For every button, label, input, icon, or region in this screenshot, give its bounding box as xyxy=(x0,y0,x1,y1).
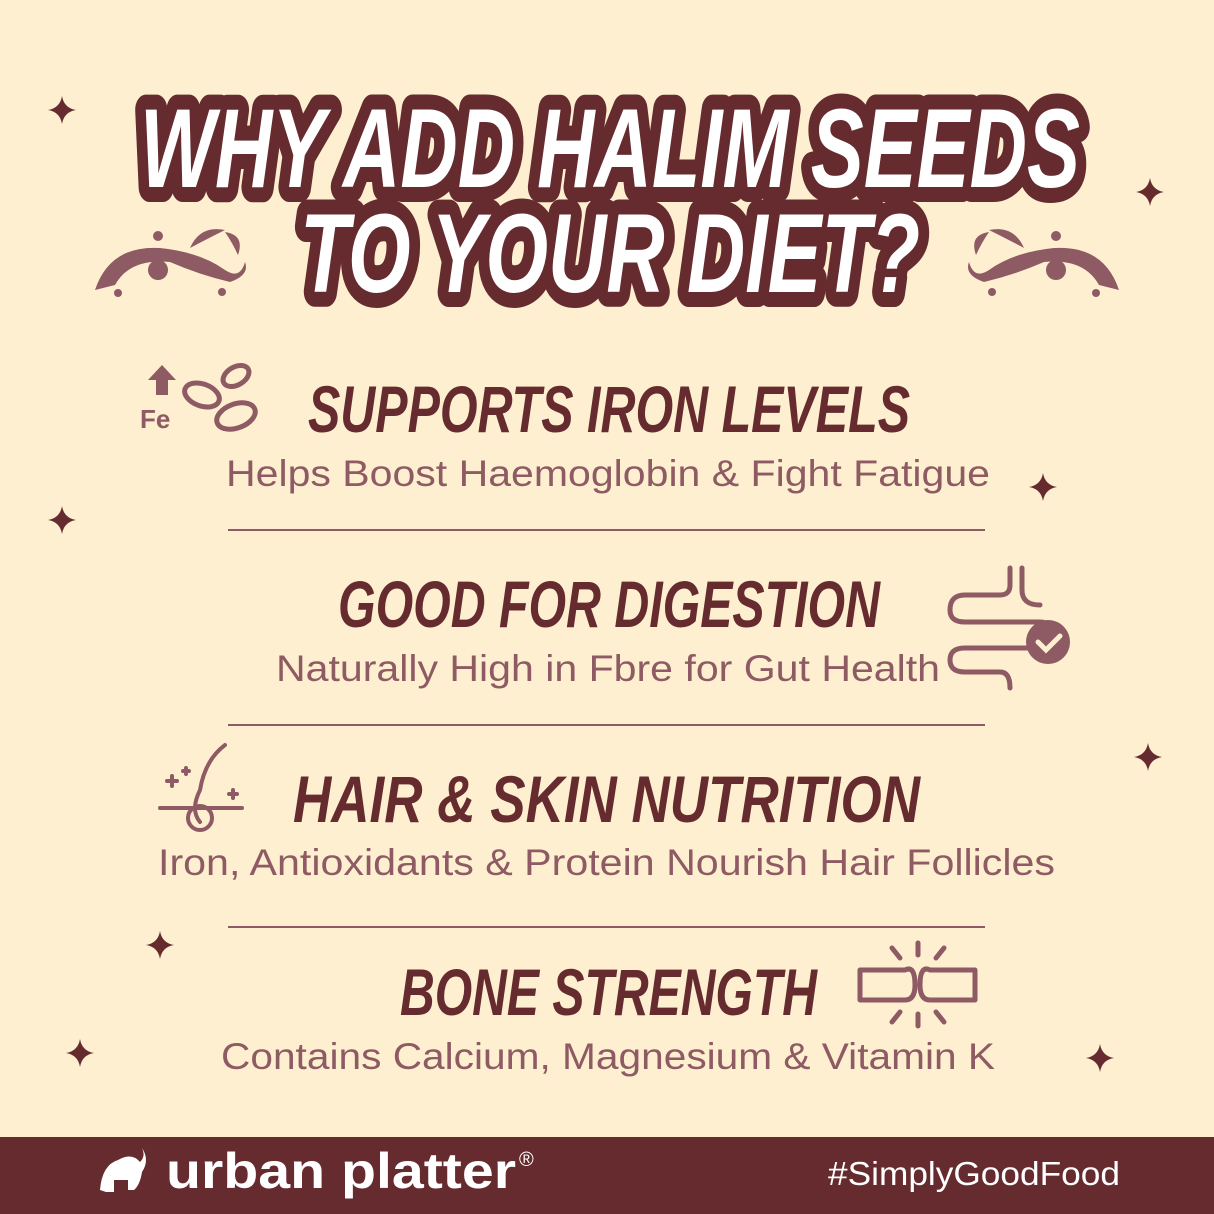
icon: iron Fe xyxy=(140,361,259,434)
footer: urban platter xyxy=(166,1143,516,1199)
section 1 xyxy=(226,372,990,494)
section 1: Helps Boost Haemoglobin & Fight Fatigue xyxy=(226,453,990,494)
section 3: HAIR & SKIN NUTRITION xyxy=(293,762,921,836)
section 3 xyxy=(158,762,1055,883)
section 4: Contains Calcium, Magnesium & Vitamin K xyxy=(221,1036,995,1077)
icon: intestine xyxy=(950,568,1070,688)
section 2: Naturally High in Fbre for Gut Health xyxy=(276,648,940,689)
section 1: SUPPORTS IRON LEVELS xyxy=(308,372,910,446)
title xyxy=(140,86,1080,316)
footer: #SimplyGoodFood xyxy=(828,1155,1120,1192)
ornament right xyxy=(968,229,1119,297)
title: TO YOUR DIET? xyxy=(300,191,920,316)
icon: elephant xyxy=(100,1148,146,1192)
icon: hair xyxy=(160,745,242,830)
section 2 xyxy=(276,567,940,689)
icon: bone joint xyxy=(860,943,975,1026)
section 4 xyxy=(221,955,995,1077)
footer: ® xyxy=(519,1149,534,1171)
section 4: BONE STRENGTH xyxy=(400,955,818,1029)
decorative stars xyxy=(48,96,1164,1072)
title: TO YOUR DIET? xyxy=(300,191,920,316)
icon: iron Fe: Fe xyxy=(140,404,170,434)
ornament left xyxy=(95,229,246,297)
section 3: Iron, Antioxidants & Protein Nourish Hair Follicles xyxy=(158,842,1055,883)
section 2: GOOD FOR DIGESTION xyxy=(338,567,881,641)
footer xyxy=(0,1137,1214,1214)
